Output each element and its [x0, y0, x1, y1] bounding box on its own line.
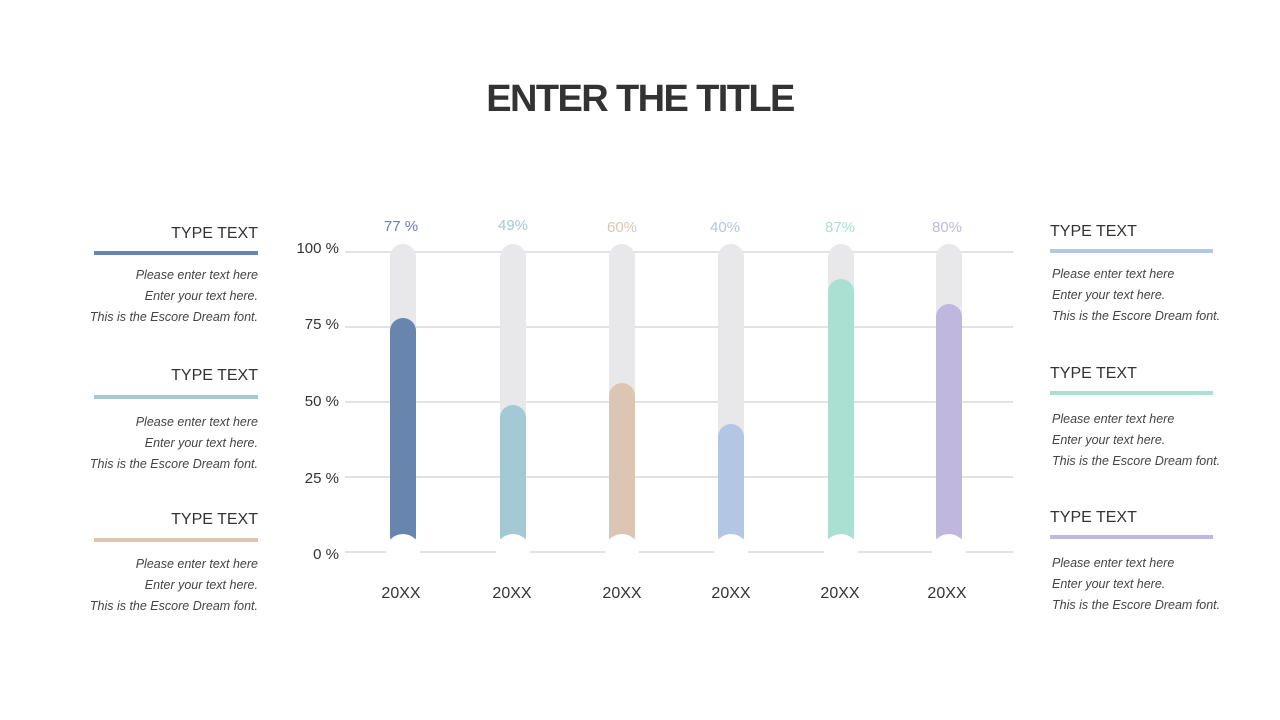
right block 3 — [1050, 509, 1220, 612]
left block 3: Please enter text here — [136, 557, 258, 571]
left block 2: Please enter text here — [136, 415, 258, 429]
right block 3: This is the Escore Dream font. — [1052, 598, 1220, 612]
axis labels — [296, 240, 339, 563]
value labels: 77 % — [384, 218, 418, 235]
year labels: 20XX — [381, 585, 421, 602]
left block 3 — [90, 511, 258, 613]
value labels: 40% — [710, 219, 740, 236]
year labels: 20XX — [711, 585, 751, 602]
right block 3: TYPE TEXT — [1050, 509, 1137, 526]
left block 3: Enter your text here. — [145, 578, 258, 592]
left block 1 — [90, 225, 258, 324]
left block 2 — [90, 367, 258, 471]
axis labels: 75 % — [305, 316, 339, 333]
left block 1: This is the Escore Dream font. — [90, 310, 258, 324]
left block 2: Enter your text here. — [145, 436, 258, 450]
left block 3: TYPE TEXT — [171, 511, 258, 528]
right block 1: This is the Escore Dream font. — [1052, 309, 1220, 323]
left block 1: TYPE TEXT — [171, 225, 258, 242]
axis labels: 0 % — [313, 546, 339, 563]
year labels: 20XX — [602, 585, 642, 602]
left block 2: TYPE TEXT — [171, 367, 258, 384]
right block 1: TYPE TEXT — [1050, 223, 1137, 240]
axis labels: 25 % — [305, 470, 339, 487]
left block 2: This is the Escore Dream font. — [90, 457, 258, 471]
left block 3: This is the Escore Dream font. — [90, 599, 258, 613]
left block 1: Enter your text here. — [145, 289, 258, 303]
value labels: 49% — [498, 217, 528, 234]
axis labels: 50 % — [305, 393, 339, 410]
right block 1: Please enter text here — [1052, 267, 1174, 281]
value labels: 80% — [932, 219, 962, 236]
right block 1: Enter your text here. — [1052, 288, 1165, 302]
right block 3: Please enter text here — [1052, 556, 1174, 570]
year labels: 20XX — [927, 585, 967, 602]
right block 3: Enter your text here. — [1052, 577, 1165, 591]
right block 2: Enter your text here. — [1052, 433, 1165, 447]
axis labels: 100 % — [296, 240, 339, 257]
right block 2: TYPE TEXT — [1050, 365, 1137, 382]
right block 2 — [1050, 365, 1220, 468]
right block 2: Please enter text here — [1052, 412, 1174, 426]
right block 1 — [1050, 223, 1220, 323]
bars — [386, 244, 966, 568]
year labels: 20XX — [820, 585, 860, 602]
value labels: 60% — [607, 219, 637, 236]
value labels: 87% — [825, 219, 855, 236]
year labels — [381, 585, 967, 602]
left block 1: Please enter text here — [136, 268, 258, 282]
year labels: 20XX — [492, 585, 532, 602]
value labels — [384, 217, 962, 236]
right block 2: This is the Escore Dream font. — [1052, 454, 1220, 468]
title: ENTER THE TITLE — [486, 78, 794, 120]
